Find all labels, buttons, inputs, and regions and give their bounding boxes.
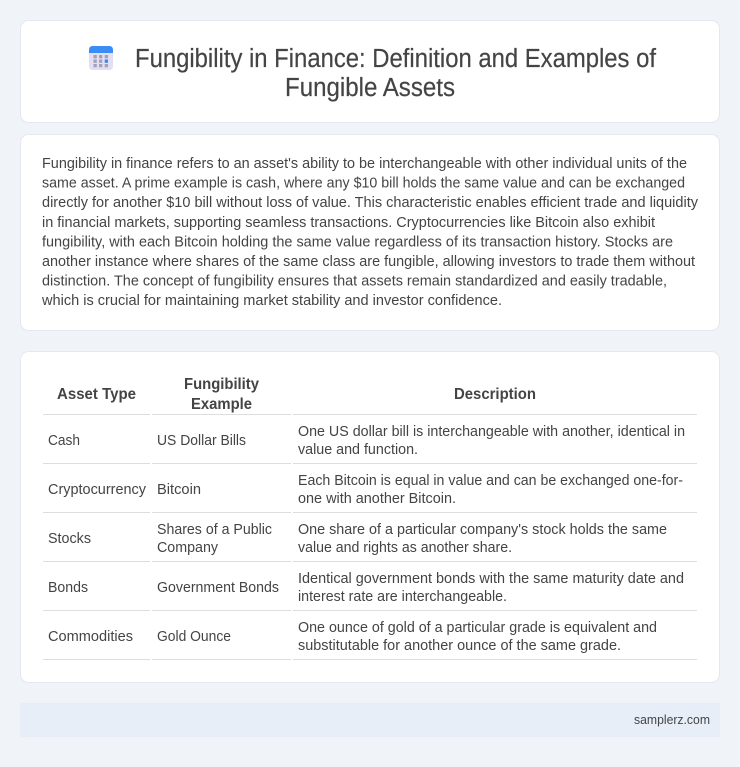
- text block: definition paragraph: distinction. The concept of fungibility ensures that assets remain standardized and easily tradable,: [42, 274, 667, 290]
- title: Fungible Assets: [285, 74, 455, 102]
- text block: definition paragraph: [41, 156, 699, 309]
- text block: definition paragraph: another instance where shares of the same class are fungible, allowing investors to trade them without: [42, 254, 695, 270]
- icon: calendar: [89, 46, 113, 70]
- table row: bonds: [48, 571, 684, 605]
- table row: cash: US Dollar Bills: [157, 433, 246, 449]
- table row: bonds: interest rate are interchangeable.: [298, 589, 507, 605]
- table row: bonds: Bonds: [48, 580, 88, 596]
- text block: definition paragraph: directly for another $10 bill without loss of value. This characteristic enables efficient trade and liquidity: [42, 195, 699, 211]
- table row: cryptocurrency: Cryptocurrency: [48, 482, 147, 498]
- table row: stocks: Stocks: [48, 531, 91, 547]
- text block: definition paragraph: same asset. A prime example is cash, where any $10 bill holds the same value and can be exchanged: [42, 176, 685, 192]
- footer bar: [20, 703, 720, 737]
- table row: stocks: Shares of a Public: [157, 522, 272, 538]
- table row: commodities: [48, 620, 657, 654]
- table row: stocks: One share of a particular company's stock holds the same: [298, 522, 667, 538]
- title: Fungibility in Finance: Definition and Examples of: [135, 45, 657, 73]
- panel: asset table: [20, 352, 720, 682]
- table row: cryptocurrency: Bitcoin: [157, 482, 201, 498]
- table row: commodities: substitutable for another ounce of the same grade.: [298, 638, 621, 654]
- table row: cash: [48, 424, 685, 458]
- table row: bonds: Identical government bonds with the same maturity date and: [298, 571, 684, 587]
- table row: cryptocurrency: Each Bitcoin is equal in value and can be exchanged one-for-: [298, 473, 683, 489]
- table row: stocks: value and rights as another share.: [298, 540, 512, 556]
- table header row: [57, 376, 536, 413]
- table row: commodities: One ounce of gold of a particular grade is equivalent and: [298, 620, 657, 636]
- footer source text: samplerz.com: [634, 713, 710, 727]
- table header row: Asset Type: [57, 386, 136, 403]
- title: [135, 45, 657, 102]
- table row: cryptocurrency: one with another Bitcoin.: [298, 491, 456, 507]
- panel: title header: [20, 20, 720, 122]
- table row: bonds: Government Bonds: [157, 580, 279, 596]
- table row: commodities: Gold Ounce: [157, 629, 231, 645]
- text block: definition paragraph: which is crucial for maintaining market stability and investor confidence.: [41, 293, 502, 309]
- table header row: Description: [454, 386, 536, 403]
- table row: stocks: Company: [157, 540, 219, 556]
- table header row: Example: [191, 396, 252, 413]
- table header row: Fungibility: [184, 376, 259, 393]
- table row: cash: Cash: [48, 433, 80, 449]
- text block: definition paragraph: in financial markets, supporting seamless transactions. Cryptocurrencies like Bitcoin also exhibit: [42, 215, 655, 231]
- table row: commodities: Commodities: [48, 629, 133, 645]
- table row: cash: value and function.: [298, 442, 418, 458]
- table row: cryptocurrency: [48, 473, 683, 507]
- panel: introduction text: [20, 134, 720, 330]
- table row: cash: One US dollar bill is interchangeable with another, identical in: [298, 424, 685, 440]
- text block: definition paragraph: fungibility, with each Bitcoin holding the same value regardless of its transaction history. Stocks are: [42, 234, 673, 250]
- table row: stocks: [48, 522, 667, 556]
- text block: definition paragraph: Fungibility in finance refers to an asset's ability to be interchangeable with other individual units of the: [42, 156, 687, 172]
